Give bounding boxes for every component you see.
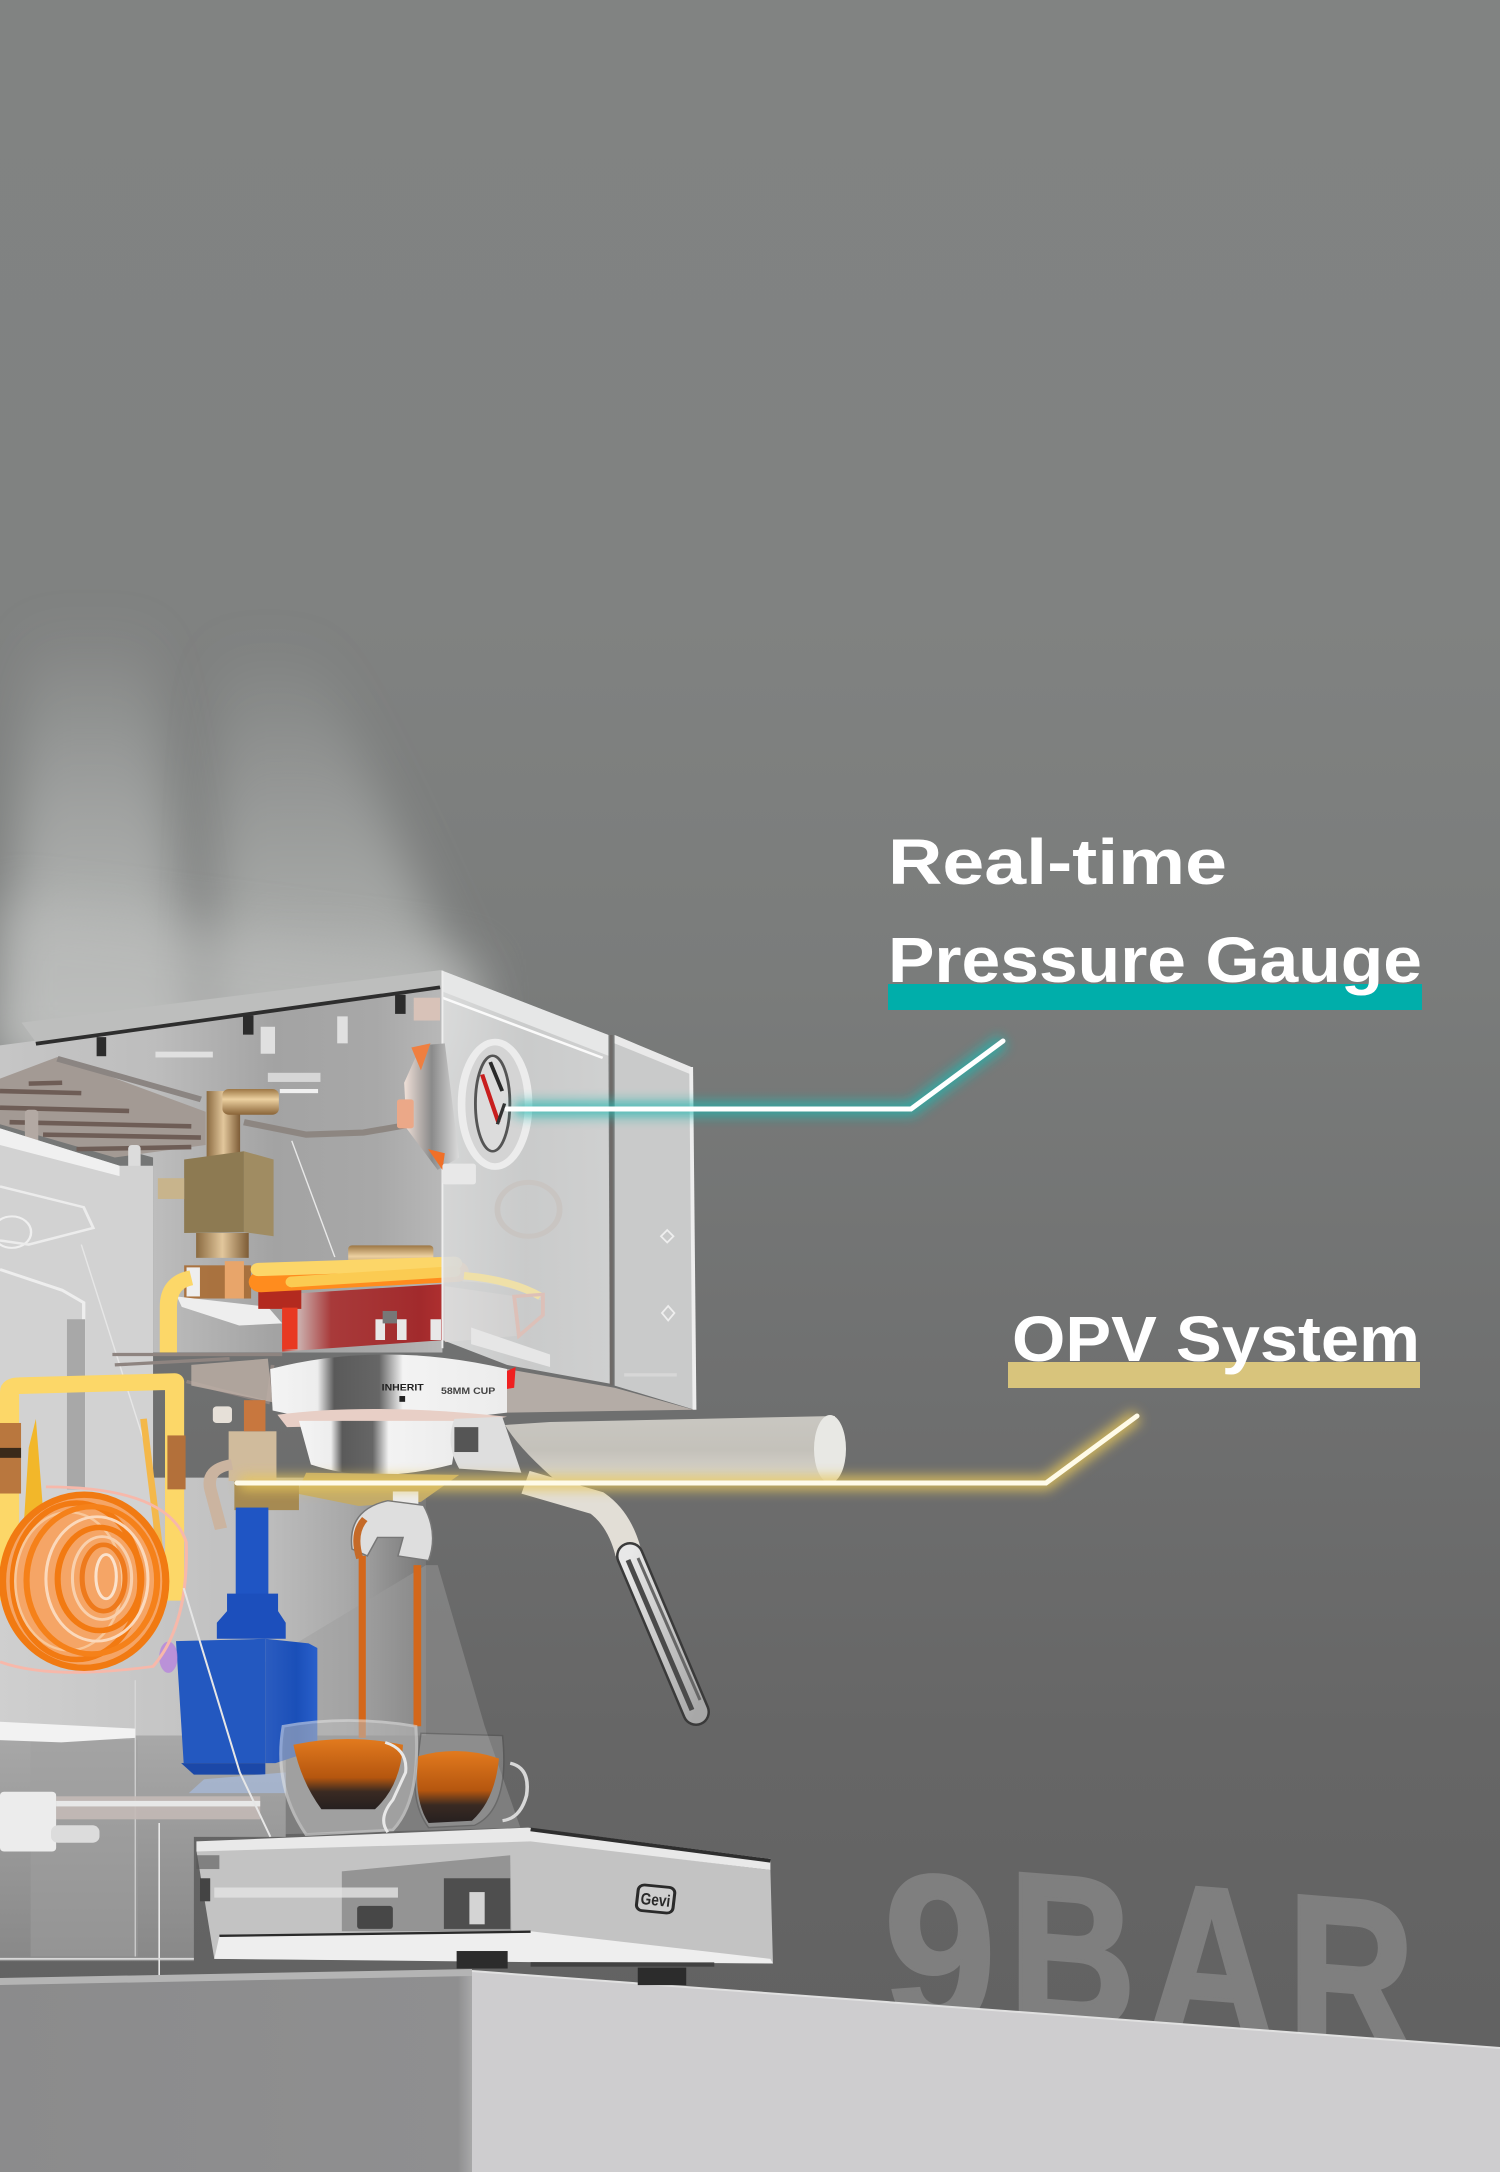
pale bracket xyxy=(177,1296,282,1325)
faint wire xyxy=(292,1141,335,1257)
logo badge xyxy=(636,1884,675,1914)
espresso machine upper body xyxy=(0,970,694,1601)
spouts xyxy=(351,1491,433,1561)
boiler brass nut xyxy=(348,1245,433,1273)
solenoid valve box xyxy=(158,1151,274,1299)
espresso cup rear xyxy=(415,1733,527,1828)
rear pipe xyxy=(244,1122,411,1135)
yellow boiler lid xyxy=(258,1263,540,1296)
espresso machine lower components xyxy=(0,1482,773,1985)
top lid xyxy=(22,970,442,1042)
machine bottom strip xyxy=(507,1369,694,1413)
lower left shelf xyxy=(0,1722,135,1742)
floor plinth xyxy=(0,1969,1500,2172)
logo badge: Gevi xyxy=(640,1889,671,1911)
purple glow under coil xyxy=(159,1642,178,1673)
wire cluster xyxy=(112,1355,282,1402)
water tube xyxy=(0,1792,260,1852)
decorative text: 9BAR: 9 xyxy=(884,1825,996,2078)
heating coil xyxy=(0,1487,186,1672)
callout line: OPV system xyxy=(237,1416,1137,1483)
pressure gauge xyxy=(397,1042,529,1184)
label: Real-time Pressure Gauge: Pressure Gauge xyxy=(888,924,1422,996)
coffee streams xyxy=(362,1556,417,1738)
top rail xyxy=(36,987,440,1044)
portafilter handle xyxy=(505,1415,846,1484)
heat sink xyxy=(0,1057,206,1195)
portafilter basket xyxy=(277,1409,521,1506)
blue pump xyxy=(176,1508,317,1793)
seam xyxy=(608,1035,614,1386)
label: OPV System: OPV System xyxy=(1012,1303,1420,1375)
label: Real-time Pressure Gauge: Real-time xyxy=(888,826,1227,898)
group head xyxy=(270,1355,507,1419)
interior back wall xyxy=(0,987,442,1352)
left translucent panel xyxy=(0,1128,153,1601)
callout line: pressure gauge xyxy=(507,1041,1003,1109)
espresso cup front xyxy=(281,1721,417,1835)
decorative text: 9BAR: BAR xyxy=(1009,1826,1415,2099)
translucent diagonal strut xyxy=(184,1588,270,1837)
steam wand elbow xyxy=(526,1482,629,1554)
brass connector xyxy=(210,1400,299,1529)
light plume above machine xyxy=(0,620,480,1060)
drip tray xyxy=(196,1828,773,1963)
solenoid valve stem xyxy=(207,1089,318,1157)
control panel xyxy=(615,1035,694,1410)
steam wand xyxy=(628,1556,700,1712)
group head: 58MM CUP xyxy=(441,1387,496,1397)
label: Real-time Pressure Gauge xyxy=(888,826,1422,1010)
espresso machine lower wall xyxy=(0,1478,520,1975)
red boiler xyxy=(258,1284,517,1352)
feet xyxy=(457,1951,714,1985)
yellow pipes xyxy=(10,1278,191,1601)
pipe collars xyxy=(0,1419,186,1572)
side panel xyxy=(442,971,610,1384)
group head: INHERIT xyxy=(382,1383,424,1393)
